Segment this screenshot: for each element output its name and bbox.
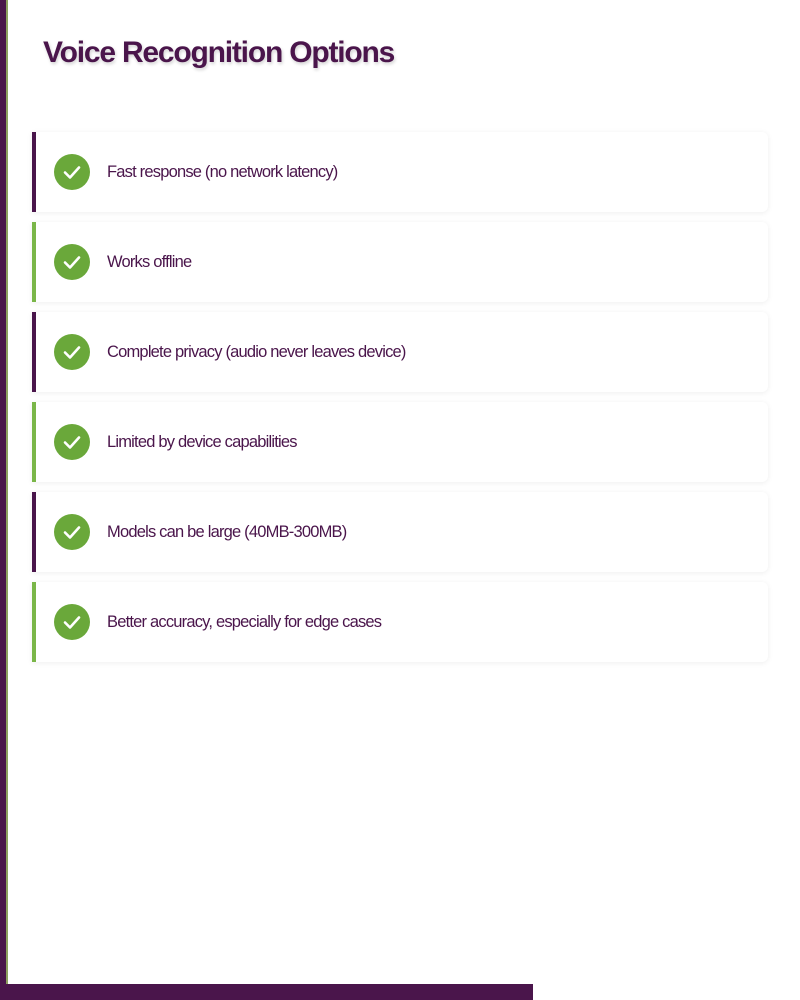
icon: check	[54, 334, 90, 370]
icon: check	[54, 604, 90, 640]
card: accuracy: Better accuracy, especially for edge cases	[107, 613, 381, 631]
title: Voice Recognition Options	[43, 36, 394, 69]
card: models large	[32, 492, 768, 572]
card: fast response	[32, 132, 768, 212]
card: privacy: Complete privacy (audio never leaves device)	[107, 343, 406, 361]
card: limited	[32, 402, 768, 482]
card: limited: Limited by device capabilities	[107, 433, 297, 451]
card: fast response: Fast response (no network latency)	[107, 163, 338, 181]
card: models large: Models can be large (40MB-300MB)	[107, 523, 346, 541]
card: privacy	[32, 312, 768, 392]
icon: check	[54, 424, 90, 460]
card: accuracy	[32, 582, 768, 662]
icon: check	[54, 154, 90, 190]
icon: check	[54, 514, 90, 550]
card: works offline	[32, 222, 768, 302]
icon: check	[54, 244, 90, 280]
bottom bar	[0, 984, 533, 1000]
card: works offline: Works offline	[107, 253, 191, 271]
